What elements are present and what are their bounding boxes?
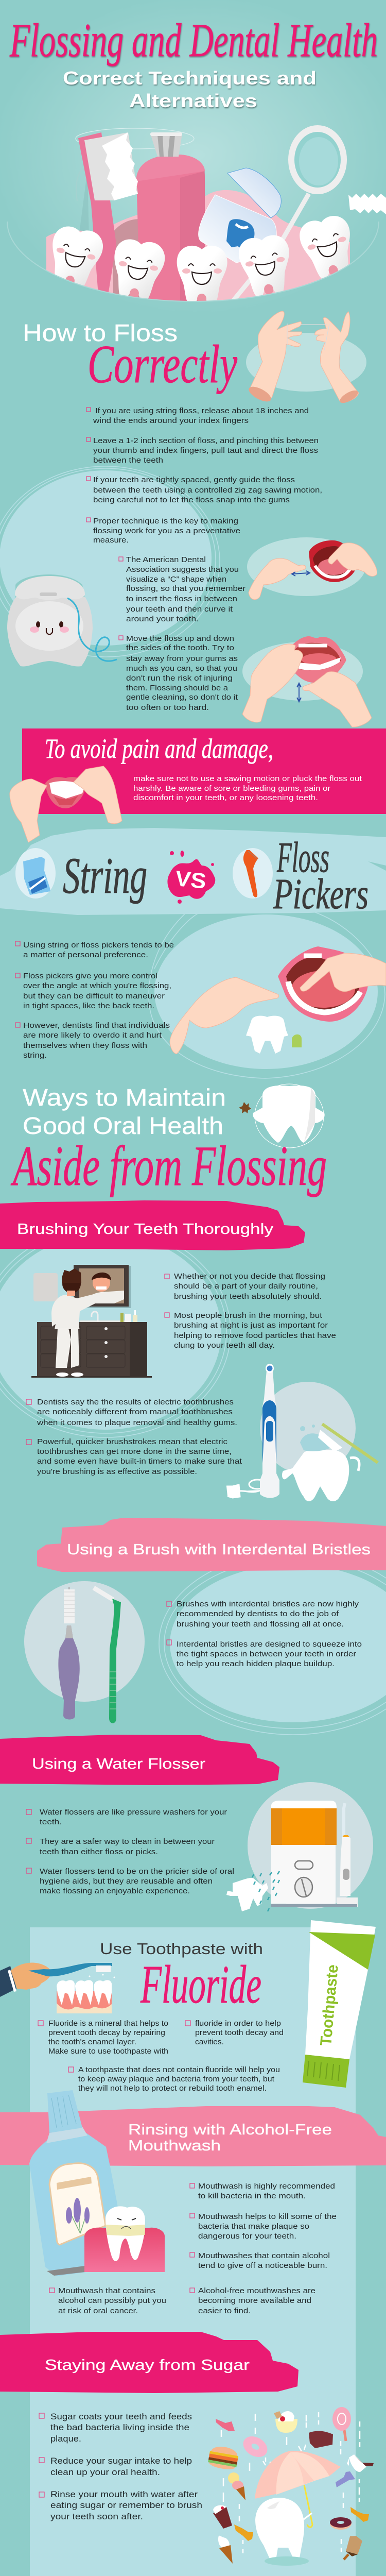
mirror (74, 1265, 131, 1308)
text block: mouthwash right column: Alcohol-free mouthwashes are (198, 2287, 315, 2295)
panel: avoid pain and damage (10, 728, 386, 842)
tooth character 4 (239, 235, 289, 296)
text block: string vs pickers: in tight spaces, like the back teeth. (23, 1002, 154, 1010)
subtitle: Alternatives (129, 90, 257, 111)
heading: How to Floss Correctly: Correctly (87, 334, 237, 394)
text block: flossing steps: between the teeth using a controlled zig zag sawing motion, (93, 486, 322, 495)
candy orange (234, 2524, 253, 2541)
tooth character 1 (52, 227, 103, 285)
banner: Using a Water Flosser: Using a Water Flosser (32, 1756, 205, 1772)
text block: fluoride: to keep away plaque and bacteria from your teeth, but (78, 2075, 274, 2083)
body text: harshly. Be aware of sore or bleeding gums, pain or (133, 785, 330, 793)
interdental brush (348, 194, 386, 214)
heading: Ways to Maintain Good Oral Health: Ways to Maintain (23, 1084, 226, 1111)
icon: electric toothbrush and tooth (226, 1364, 378, 1501)
text block: sugar: plaque. (50, 2434, 81, 2444)
background glow (0, 0, 386, 314)
text block: mouthwash right column: bacteria that make plaque so (198, 2223, 309, 2231)
text block: brushing daily: Whether or not you decide that flossing (174, 1273, 325, 1281)
iced drink (213, 2505, 232, 2529)
floss container (199, 168, 281, 263)
cake (309, 2431, 333, 2448)
text block: flossing steps: between the teeth (93, 456, 163, 465)
lollipop (332, 2407, 351, 2441)
text block: electric toothbrushes: and some even have built-in timers to make sure that (37, 1458, 242, 1466)
text block: sugar: Sugar coats your teeth and feeds (50, 2412, 192, 2421)
text block: fluoride: Make sure to use toothpaste with (48, 2047, 168, 2056)
candy orange right (350, 2507, 369, 2522)
text block: C shape advice (119, 556, 245, 623)
heading: To avoid pain and damage, (45, 733, 273, 764)
banner: Brushing Your Teeth Thoroughly (0, 1200, 305, 1250)
text block: electric toothbrushes: you're brushing is as effective as possible. (37, 1468, 197, 1476)
text block: interdental bristles: Interdental bristles are designed to squeeze into (177, 1640, 362, 1649)
panel: light circle with rings behind mouth (149, 912, 385, 1078)
plug (226, 1485, 261, 1498)
vanity (31, 1320, 152, 1378)
droplets (252, 1871, 279, 1911)
icon: tooth under water spray (226, 1878, 268, 1911)
text block: sugar: your teeth soon after. (50, 2512, 143, 2521)
oval: string floss (15, 848, 56, 899)
candy pink (216, 2419, 235, 2431)
text block: interdental bristles: the tight spaces in between your teeth in order (177, 1650, 356, 1658)
text block: mouthwash left column: at risk of oral cancer. (58, 2307, 138, 2315)
text block: interdental bristles: brushing your teeth and flossing all at once. (177, 1620, 344, 1629)
text block: fluoride: prevent tooth decay and (195, 2029, 284, 2037)
text block: string vs pickers: string. (23, 1052, 47, 1060)
text block: flossing steps: Proper technique is the key to making (93, 517, 238, 526)
text block: electric toothbrushes: are noticeably different from manual toothbrushes (37, 1408, 233, 1416)
text block: move the floss: don't run the risk of injuring (126, 674, 233, 683)
title (9, 14, 378, 111)
icon: man brushing teeth at mirror (31, 1265, 152, 1378)
text block: brushing daily: clung to your teeth all day. (174, 1342, 275, 1350)
text block: flossing steps: wind the ends around your index fingers (93, 417, 249, 425)
tooth (255, 2498, 304, 2563)
banner: Rinsing with Alcohol-Free Mouthwash: Rinsing with Alcohol-Free (128, 2122, 332, 2138)
text block: brushing daily: should be a part of your daily routine, (174, 1282, 318, 1291)
body text (133, 775, 362, 802)
text block: C shape advice: your teeth and then curve it (126, 605, 233, 614)
text block: move the floss (119, 635, 238, 712)
pink donut (239, 2432, 271, 2461)
text block: flossing steps: measure. (93, 536, 129, 545)
text block: C shape advice: The American Dental (126, 556, 206, 564)
text block: string vs pickers: but they can be difficult to maneuver (23, 992, 165, 1001)
text block: string vs pickers: Using string or floss pickers tends to be (23, 941, 174, 950)
text block: electric toothbrushes (26, 1398, 242, 1476)
banner: Rinsing with Alcohol-Free Mouthwash (0, 2106, 386, 2166)
subtitle: Correct Techniques and (63, 67, 317, 89)
text block: mouthwash right column: Mouthwashes that contain alcohol (198, 2252, 330, 2260)
text block: water flossers: teeth than either floss or picks. (40, 1848, 158, 1856)
panel: String vs Floss Pickers brushstroke (0, 828, 386, 918)
text block: interdental bristles (167, 1600, 362, 1668)
text block: electric toothbrushes: when it comes to plaque removal and healthy gums. (37, 1419, 237, 1427)
heading: Use Toothpaste with Fluoride: Use Toothpaste with (100, 1940, 263, 1958)
text block: flossing steps (86, 407, 322, 545)
text block: brushing daily: brushing your teeth absolutely should. (174, 1293, 322, 1301)
text block: sugar: Reduce your sugar intake to help (50, 2456, 192, 2466)
text block: sugar: Rinse your mouth with water after (50, 2490, 198, 2499)
purple brush (58, 1587, 80, 1720)
text block: electric toothbrushes: toothbrushes can get more done in the same time, (37, 1448, 232, 1456)
faucet and toiletries (92, 1310, 137, 1322)
man (51, 1268, 99, 1377)
popsicle (344, 2536, 362, 2560)
banner: Staying Away from Sugar: Staying Away from Sugar (45, 2357, 250, 2374)
icon: green toothpaste tube: Toothpaste (317, 1964, 342, 2046)
text block: mouthwash right column: to kill bacteria in the mouth. (198, 2192, 306, 2200)
candy purple (336, 2471, 355, 2487)
banner: Rinsing with Alcohol-Free Mouthwash: Mouthwash (128, 2138, 221, 2154)
oval: floss pick (233, 848, 273, 899)
banner: Using a Brush with Interdental Bristles: Using a Brush with Interdental Bristles (67, 1541, 371, 1558)
rain (221, 2412, 360, 2553)
text block: C shape advice: around your tooth. (126, 615, 199, 623)
lavender (66, 2198, 90, 2233)
icon: hands holding floss (246, 311, 366, 405)
text block: fluoride: Fluoride is a mineral that helps to (48, 2020, 168, 2028)
text block: C shape advice: visualize a “C” shape when (126, 575, 226, 584)
icon: flossing front teeth (242, 636, 372, 727)
text block: mouthwash right column (190, 2182, 337, 2315)
pink mouthwash bottle (136, 132, 205, 301)
icon: smiling floss container character (7, 574, 117, 667)
burger (207, 2445, 239, 2471)
text block: interdental bristles: Brushes with interdental bristles are now highly (177, 1600, 359, 1608)
gums (84, 2228, 165, 2272)
brush (260, 1370, 279, 1498)
chocolate donut (330, 2517, 352, 2530)
text block: fluoride: prevent tooth decay by repairing (48, 2029, 165, 2037)
text block: string vs pickers: are more likely to overdo it and hurt (23, 1031, 162, 1040)
text block: fluoride: A toothpaste that does not contain fluoride will help you (78, 2066, 280, 2074)
green brush (94, 1588, 121, 1723)
banner: Staying Away from Sugar (0, 2332, 299, 2393)
icon: germ (239, 1102, 251, 1113)
icon: clean tooth with sparkles (239, 1084, 325, 1148)
coffee cup (347, 2454, 366, 2472)
text block: fluoride: the tooth's enamel layer. (48, 2038, 136, 2046)
text block: string vs pickers: themselves when they floss with (23, 1042, 147, 1050)
text block: C shape advice: flossing, so that you remember (126, 585, 245, 593)
text block: water flossers: Water flossers are like pressure washers for your (40, 1808, 227, 1817)
text block: interdental bristles: recommended by dentists to do the job of (177, 1610, 339, 1618)
banner: Using a Brush with Interdental Bristles (37, 1518, 386, 1572)
heading: Use Toothpaste with Fluoride: Fluoride (140, 1954, 261, 2014)
icon: open mouth with hands flossing (170, 946, 386, 1054)
heading: How to Floss Correctly: How to Floss (23, 319, 178, 346)
panel: light ellipse with rings (0, 466, 220, 657)
icon: VS splash (167, 851, 215, 904)
dental mirror (233, 125, 347, 301)
text block: mouthwash left column: Mouthwash that contains (58, 2287, 155, 2295)
text block: mouthwash right column: becoming more available and (198, 2297, 311, 2305)
text block: flossing steps: flossing work for you as a preventative (93, 527, 240, 535)
panel: light ellipse brushing (0, 1226, 231, 1437)
text block: water flossers: hygiene aids, but they are reusable and often (40, 1877, 213, 1886)
text block: water flossers: Water flossers tend to be on the pricier side of oral (40, 1868, 234, 1876)
text block: string vs pickers: over the angle at which you're flossing, (23, 982, 171, 990)
text block: water flossers: They are a safer way to clean in between your (40, 1838, 215, 1846)
banner: Using a Water Flosser (0, 1735, 279, 1785)
icon: tooth under umbrella in rain of sweets (207, 2407, 374, 2566)
text block: move the floss: Move the floss up and down (126, 635, 234, 643)
text block: water flossers: make flossing an enjoyable experience. (40, 1887, 190, 1895)
tooth character 3 (177, 246, 227, 306)
icon: mouthwash bottle with lavender (29, 2090, 165, 2276)
text block: move the floss: too often or too hard. (126, 704, 209, 712)
text block: string vs pickers: Floss pickers give you more control (23, 972, 157, 980)
text block: fluoride: cavities. (195, 2038, 224, 2046)
icon: green toothpaste tube (303, 1920, 376, 2088)
body text: make sure not to use a sawing motion or pluck the floss out (133, 775, 362, 783)
gums behind tools (46, 190, 350, 301)
umbrella (255, 2451, 341, 2499)
icon: VS splash: VS (174, 866, 207, 893)
text block: flossing steps: your thumb and index fingers, pull taut and direct the floss (93, 447, 318, 455)
hero illustration: dental tools and happy teeth (44, 125, 386, 306)
text block: mouthwash right column: Mouthwash is highly recommended (198, 2182, 335, 2191)
label: String: String (63, 847, 147, 904)
panel: toothpaste and mouthwash sheet (30, 1927, 356, 2576)
sundae (274, 2411, 297, 2433)
tooth with plaque (106, 2206, 145, 2261)
vanilla cone (218, 2536, 233, 2564)
text block: flossing steps: Leave a 1-2 inch section of floss, and pinching this between (93, 437, 319, 445)
icon: hand brushing teeth (0, 1963, 115, 2013)
icon: interdental brushes (24, 1581, 145, 1723)
text block: mouthwash right column: dangerous for your teeth. (198, 2232, 296, 2241)
icon: water flosser (226, 1782, 373, 1911)
icon: flossing back teeth (247, 537, 377, 600)
text block: mouthwash right column: tend to give off a noticeable burn. (198, 2262, 327, 2270)
text block: sugar (39, 2412, 202, 2521)
yellow-pink ice cream (228, 2472, 245, 2500)
body text: discomfort in your teeth, or any loosening teeth. (133, 794, 318, 802)
text block: move the floss: stay away from your gums as (126, 655, 238, 663)
text block: electric toothbrushes: Dentists say the the results of electric toothbrushes (37, 1398, 234, 1406)
heading: Use Toothpaste with Fluoride (100, 1940, 263, 2014)
text block: electric toothbrushes: Powerful, quicker brushstrokes mean that electric (37, 1438, 227, 1446)
text block: flossing steps: If your teeth are tightly spaced, gently guide the floss (93, 476, 295, 484)
subtitle (63, 67, 317, 111)
icon: small tooth with floss (246, 1016, 302, 1054)
text block: string vs pickers: a matter of personal preference. (23, 951, 148, 959)
text block: sugar: clean up your oral health. (50, 2468, 160, 2477)
arrow: side to side (292, 571, 310, 576)
text block: fluoride: fluoride in order to help (195, 2020, 281, 2028)
label: Floss Pickers: Floss (276, 834, 329, 882)
text block: water flossers (26, 1808, 234, 1895)
tooth (282, 1450, 349, 1501)
text block: mouthwash right column: easier to find. (198, 2307, 251, 2315)
heading: How to Floss Correctly (23, 319, 237, 394)
text block: move the floss: much as you can, so that you (126, 665, 237, 673)
heading: Ways to Maintain Good Oral Health (23, 1084, 226, 1139)
text block: move the floss: them. Flossing should be a (126, 684, 229, 692)
text block: C shape advice: to insert the floss in between (126, 595, 237, 603)
banner: Brushing Your Teeth Thoroughly: Brushing Your Teeth Thoroughly (17, 1221, 274, 1238)
text block: C shape advice: Association suggests that you (126, 566, 239, 574)
text block: brushing daily: helping to remove food particles that have (174, 1332, 336, 1340)
text block: flossing steps: being careful not to let the floss snap into the gums (93, 496, 290, 504)
pink toothbrush (78, 132, 138, 301)
tooth character 5 (300, 216, 350, 278)
text block: move the floss: the sides of the tooth. Try to (126, 644, 234, 652)
text block: brushing daily: Most people brush in the morning, but (174, 1312, 322, 1320)
heading: Ways to Maintain Good Oral Health: Good Oral Health (23, 1112, 223, 1139)
text block: mouthwash left column: alcohol can possibly put you (58, 2297, 166, 2305)
text block: mouthwash right column: Mouthwash helps to kill some of the (198, 2213, 337, 2221)
text block: fluoride (38, 2020, 284, 2093)
text block: interdental bristles: to help you reach hidden plaque buildup. (177, 1660, 335, 1668)
text block: sugar: eating sugar or remember to brush (50, 2501, 202, 2510)
text block: brushing daily: brushing at night is just as important for (174, 1321, 328, 1330)
text block: flossing steps: If you are using string floss, release about 18 inches and (95, 407, 309, 415)
text block: move the floss: gentle cleaning, so don't do it (126, 693, 238, 702)
text block: sugar: the bad bacteria living inside the (50, 2423, 189, 2432)
text block: string vs pickers (15, 941, 174, 1060)
text block: fluoride: they will not help to protect or rebuild tooth enamel. (78, 2084, 267, 2093)
label: Floss Pickers (273, 834, 369, 918)
text block: brushing daily (165, 1273, 336, 1350)
towel (33, 1273, 58, 1301)
panel: light ellipse interdental (159, 1552, 386, 1735)
text block: string vs pickers: However, dentists find that individuals (23, 1022, 170, 1030)
icon: hands flossing at mouth (10, 766, 122, 842)
text block: mouthwash left column (49, 2287, 166, 2315)
arrow: up and down (297, 683, 301, 702)
text block: water flossers: teeth. (40, 1818, 62, 1826)
tooth character 2 (114, 239, 165, 299)
